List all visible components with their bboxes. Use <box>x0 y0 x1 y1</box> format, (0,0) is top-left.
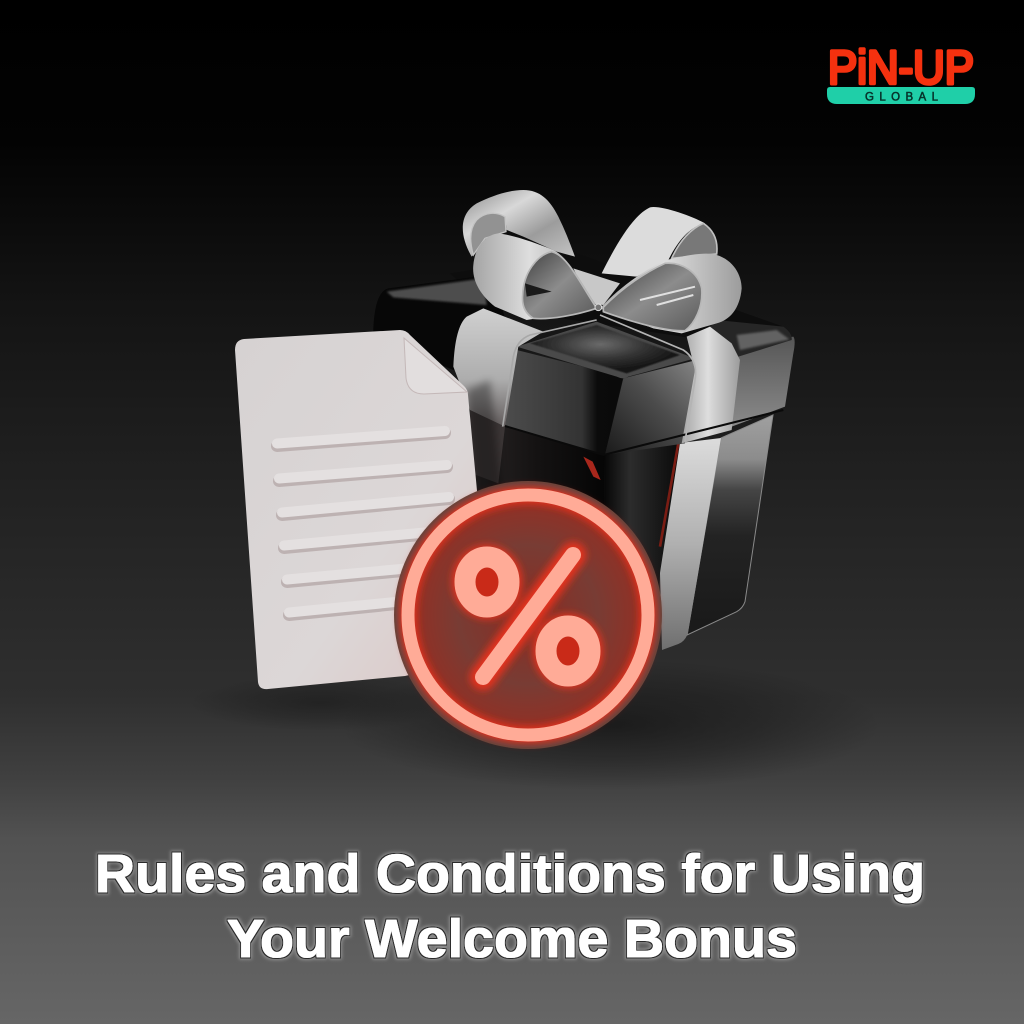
lid left highlight <box>387 278 487 305</box>
box body left face <box>470 410 605 643</box>
document page <box>235 330 492 689</box>
coin glow edge <box>394 481 662 749</box>
red ribbon edge glint <box>660 443 678 547</box>
front left loop interior <box>522 252 597 319</box>
lid top edge <box>517 322 695 378</box>
top panel reflection <box>530 325 680 373</box>
red reflection <box>583 457 601 480</box>
title line 1: Rules and Conditions for Using <box>95 844 925 904</box>
front left interior wedge <box>525 283 552 297</box>
back right bow loop <box>602 207 705 277</box>
lid right front face <box>605 360 697 455</box>
coin neon ring <box>408 495 648 735</box>
percent glow <box>465 555 590 677</box>
logo: Pin-Up Global <box>827 40 975 104</box>
left ribbon wrap <box>453 308 543 427</box>
box body right face <box>687 415 773 635</box>
bow centre band <box>573 268 620 305</box>
logo wordmark: PiN-UP <box>828 40 974 94</box>
body right silver ribbon <box>660 438 721 650</box>
percent coin <box>394 481 662 749</box>
coin face <box>401 488 655 742</box>
title line 2: Your Welcome Bonus <box>227 909 797 969</box>
document shadow on box <box>467 380 520 660</box>
percent symbol <box>465 555 590 677</box>
back right rim <box>672 223 717 258</box>
wire edge left <box>503 320 597 427</box>
lid top back face <box>450 253 783 340</box>
front left bow loop <box>473 233 598 320</box>
front right bow loop <box>600 254 742 333</box>
lid bottom shadow line <box>505 410 783 455</box>
box body middle face <box>603 443 680 643</box>
ring glow <box>408 495 648 735</box>
document with text lines <box>235 330 520 689</box>
lid left front face <box>505 350 623 455</box>
lid far right face <box>732 337 795 427</box>
body left silver ribbon remainder <box>470 410 505 483</box>
title <box>95 844 925 969</box>
gift box illustration <box>373 190 795 650</box>
logo teal band <box>827 87 975 104</box>
logo subtitle: GLOBAL <box>865 92 939 104</box>
bow knot <box>595 304 602 311</box>
back left bow loop <box>463 190 575 257</box>
floor shadow <box>190 660 880 790</box>
wire edge right <box>600 315 696 442</box>
front right loop interior <box>603 263 702 331</box>
document text lines <box>277 431 456 615</box>
document folded corner <box>404 338 467 394</box>
front right interior wires <box>640 287 695 305</box>
lid left silhouette <box>373 275 517 370</box>
lid top right strip <box>703 320 792 357</box>
lid top right highlight <box>737 330 789 350</box>
right ribbon wrap <box>682 327 740 443</box>
back left loop interior <box>471 213 506 255</box>
